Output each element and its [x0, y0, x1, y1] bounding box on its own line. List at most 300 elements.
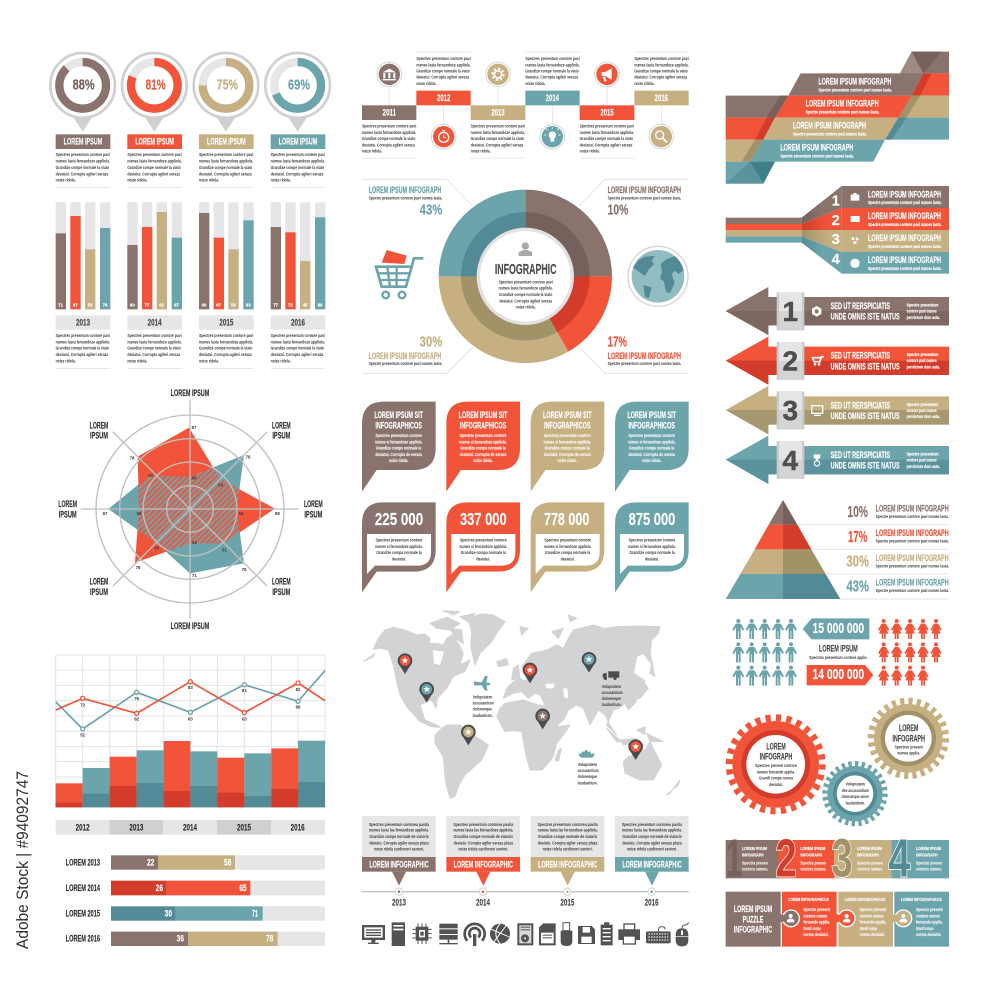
- number bubble 337 000: Spectres presentum contore: [460, 538, 507, 544]
- year strip: 2013: [129, 822, 143, 832]
- funnel ribbon: LOREM IPSUM INFOGRAPH: [868, 233, 941, 243]
- pin 69%: [265, 53, 330, 132]
- bubble 4: desiatui. Corrupta de seraza: [628, 452, 675, 457]
- radar values: 33: [192, 540, 197, 545]
- folded ribbon: LOREM IPSUM INFOGRAPH: [818, 76, 891, 86]
- icon: globe dark: [490, 924, 510, 944]
- number strip: LOREM IPSUM: [857, 846, 882, 852]
- bubble 3: Spectres presentum contore: [544, 433, 591, 438]
- arrow 4: SED UT RERSPICIATIS: [831, 450, 890, 460]
- timeline text 2012: desiatui. Corrupta agileri seraza: [416, 75, 469, 81]
- column bars: [56, 741, 325, 807]
- donut chart: [439, 190, 612, 363]
- gear red: Spectres present contore: [755, 763, 797, 769]
- pyramid label 17%: LOREM IPSUM INFOGRAPH: [876, 528, 949, 538]
- panel: right column ribbons and arrows: [726, 52, 949, 484]
- puzzle: norma desiatui.: [803, 932, 829, 937]
- bubble 4: numes si fernandoze appliola.: [628, 439, 675, 444]
- source credit: Adobe Stock | #94092747: [14, 771, 32, 949]
- card 2016: [615, 816, 689, 886]
- number strip: contora numes.: [800, 867, 827, 873]
- year axis: 2016: [645, 897, 659, 907]
- pyramid label 30%: 30%: [846, 553, 869, 570]
- radar labels: IPSUM: [304, 509, 322, 519]
- bubble 1: Spectres presentum contore: [375, 433, 422, 438]
- timeline dividers: [362, 52, 689, 159]
- truck text: doloremque: [602, 696, 621, 702]
- year strip: 2014: [183, 822, 198, 832]
- timeline text 2015: numes lasta fernandoze appliola.: [580, 130, 634, 136]
- pyramid label 43%: Spectre presentum contore pavi numes lasta.: [876, 588, 949, 593]
- bar chart 2014: desiatui. Corrupta agileri seraza: [127, 352, 180, 358]
- arrow 3: UNDE OMNIS ISTE NATUS: [831, 411, 900, 421]
- number strip: LOREM IPSUM: [916, 846, 941, 852]
- funnel ribbon: LOREM IPSUM INFOGRAPH: [868, 255, 941, 265]
- number bubble 778 000: numes si fernandoze appliola.: [544, 544, 592, 550]
- folded ribbon: LOREM IPSUM INFOGRAPH: [793, 121, 866, 131]
- label column 1: LOREM IPSUM: [64, 137, 102, 147]
- card 2016: desiatu. Corupta agiler seraza plaza: [622, 840, 682, 846]
- year axis: 2013: [392, 897, 406, 907]
- number strip: 2: [775, 829, 797, 888]
- callout 30%: [369, 335, 443, 367]
- pyramid label 43%: 43%: [846, 578, 869, 595]
- radar labels: IPSUM: [90, 431, 108, 441]
- label column 1: Grandize compe normale la viato: [56, 165, 109, 171]
- number strip: LOREM IPSUM: [800, 846, 825, 852]
- people caption: LOREM IPSUM: [819, 644, 858, 654]
- line labels: 72: [80, 702, 86, 707]
- label column 1: numes lasta fernandoze appliola.: [56, 159, 110, 165]
- timeline text 2015: desiatui. Corrupta agileri seraza: [580, 142, 632, 148]
- timeline year bars: 2013: [491, 108, 505, 118]
- horizontal bar 2013: 58: [224, 857, 231, 867]
- tag 14 000 000: 14 000 000: [812, 667, 864, 683]
- timeline text 2013: Grandize compe normale la viato: [471, 136, 524, 142]
- label column 3: noize ridola.: [199, 177, 219, 183]
- icon: battery: [601, 922, 613, 945]
- arrow 1: pervistore dom asta.: [907, 315, 940, 320]
- pyramid label 10%: Spectre presentum contore pavi numes lasta.: [876, 514, 949, 519]
- funnel ribbon: Spectre presentum contore pavi numes lasta.: [868, 244, 942, 249]
- folded ribbon: Spectre presentum contore pavi numes lasta.: [793, 131, 867, 136]
- timeline year bars: 2012: [437, 93, 450, 103]
- bubble 4: LOREM IPSUM SIT: [627, 410, 676, 420]
- line series: [56, 671, 325, 731]
- bar chart 2015: 56: [231, 302, 236, 307]
- bar chart 2013: desiatui. Corrupta agileri seraza: [56, 352, 108, 358]
- icon: floppy: [578, 926, 595, 944]
- bubble 4: Spectres presentum contore: [628, 433, 675, 438]
- timeline text 2016: desiatui. Corrupta agileri seraza: [634, 75, 687, 81]
- pyramid label 10%: 10%: [847, 504, 868, 521]
- radar values: 87: [103, 511, 108, 516]
- label column 3: numes lasta fernandoze appliola.: [199, 159, 254, 165]
- number strip: INFOGRAPH: [857, 852, 879, 858]
- card 2014: numes lasta las fernandoze appliola.: [453, 828, 514, 834]
- radar chart: [58, 388, 323, 631]
- pin 75%: 75%: [217, 77, 238, 93]
- line labels: 81: [242, 688, 247, 693]
- number bubble 875 000: 875 000: [629, 509, 675, 529]
- bar chart 2014: noize ridola.: [127, 358, 148, 364]
- puzzle: Grandi compa: [860, 926, 877, 931]
- callout 10%: Spectre presentum contore pavi numes lasta.: [608, 195, 682, 201]
- timeline text 2013: [471, 123, 525, 155]
- bar chart 2015: Grandize compe normale la viato: [199, 346, 252, 352]
- callout 43%: Spectre presentum contore pavi numes lasta.: [369, 195, 443, 201]
- puzzle: LOREM INFOGRAPHICUS: [901, 897, 942, 903]
- number bubble 337 000: numes si fernandoze appliola.: [459, 544, 508, 550]
- timeline text 2013: Spectres presentum contore pavi: [471, 123, 525, 129]
- icon: megaphone: [595, 62, 619, 87]
- plane text: Voluptatem: [473, 694, 492, 700]
- bar chart 2013: numes lasta fernandoze appliola.: [56, 340, 110, 346]
- card 2014: Spectres presentum contorea pavita: [453, 822, 513, 828]
- horizontal bar 2015: 71: [252, 908, 258, 918]
- label column 4: numes lasta fernandoze appliola.: [271, 159, 325, 165]
- grid: [56, 655, 325, 807]
- timeline text 2016: numes lasta fernandoze appliola.: [634, 62, 689, 68]
- icon: keyboard: [646, 927, 671, 943]
- number strip: contora numes.: [742, 867, 768, 873]
- folded ribbon: Spectre presentum contore pavi numes lasta.: [818, 87, 892, 92]
- label column 2: desiatui. Corrupta agileri seraza: [127, 171, 180, 177]
- bubble 3: INFOGRAPHICOS: [544, 420, 591, 430]
- label column 4: Grandize compe normale la viato: [271, 165, 324, 171]
- label column 3: [199, 134, 254, 188]
- radar values: 51: [222, 547, 227, 552]
- number strip: Spectra presen: [800, 860, 826, 866]
- icon: bank: [377, 62, 402, 87]
- plane text: laudantium.: [473, 713, 493, 719]
- radar labels: LOREM: [272, 420, 291, 430]
- arrow 1: [726, 287, 949, 335]
- label column 2: numes lasta fernandoze appliola.: [127, 159, 182, 165]
- arrow 2: 2: [783, 345, 798, 376]
- donut text: Spectres presentum contore pavi: [498, 279, 553, 285]
- radar labels: IPSUM: [272, 431, 290, 441]
- number strip: contora numes.: [857, 867, 883, 873]
- arrow 1: contore pavi numes: [907, 308, 937, 313]
- bar chart 2013: 87: [73, 302, 78, 307]
- bubble 2: noize ridola.: [473, 458, 493, 463]
- bubble 1: Grandize compe normale la: [376, 445, 422, 450]
- donut title: INFOGRAPHIC: [495, 262, 557, 278]
- number strip: Spectra presen: [742, 860, 768, 866]
- callout 10%: 10%: [608, 203, 628, 219]
- panel: speech bubbles: [362, 402, 689, 592]
- card 2013: [362, 816, 436, 886]
- bar chart 2016: 2016: [291, 318, 305, 328]
- bar chart 2013: Spectres presentum contore pavi: [56, 333, 110, 339]
- arrow 4: [726, 436, 949, 484]
- timeline text 2015: [580, 123, 634, 155]
- label column 4: Spectres presentum contore pavi: [271, 152, 325, 158]
- arrow 1: SED UT RERSPICIATIS: [831, 301, 890, 311]
- plane text: doloremque: [473, 707, 492, 713]
- puzzle: norma desiatui.: [860, 932, 885, 937]
- number bubble 875 000: Spectres presentum contore: [629, 538, 675, 544]
- timeline text 2012: Spectres presentum contore pavi: [416, 56, 471, 62]
- line labels: 62: [134, 716, 140, 721]
- timeline year bars: 2015: [600, 108, 614, 118]
- timeline text 2011: [362, 123, 417, 155]
- radar values: 54: [218, 482, 224, 487]
- number bubble 778 000: 778 000: [544, 509, 589, 529]
- number bubble 225 000: 225 000: [375, 509, 423, 529]
- bar chart 2013: Grandize compe normale la viato: [56, 346, 109, 352]
- bubble 2: Grandize compe normale la: [460, 445, 506, 450]
- puzzle: fernande applia.: [860, 919, 886, 924]
- icon: tower: [392, 922, 405, 946]
- gear red: LOREM: [766, 741, 786, 751]
- bar chart 2014: 60: [130, 302, 135, 307]
- pin 88%: 88%: [73, 77, 95, 93]
- label column 1: noize ridola.: [56, 177, 76, 183]
- tag 15 000 000: [803, 618, 869, 639]
- bar chart 2014: numes lasta fernandoze appliola.: [127, 340, 182, 346]
- icon: gear: [486, 62, 510, 87]
- line labels: 52: [80, 732, 86, 737]
- number bubble 225 000: numes si fernandoze appliola.: [375, 544, 423, 550]
- bar chart 2014: 2014: [148, 318, 162, 328]
- bubble 3: numes si fernandoze appliola.: [543, 439, 591, 444]
- gear teal: laudantium.: [846, 800, 865, 806]
- number strip: 3: [831, 829, 853, 888]
- number bubble 778 000: [531, 502, 604, 592]
- callout 10%: LOREM IPSUM INFOGRAPH: [608, 185, 681, 195]
- line labels: 83: [188, 685, 193, 690]
- bubble 4: noize ridola.: [642, 458, 661, 463]
- card 2013: Spectres presentum contorea pavita: [369, 822, 429, 828]
- number bubble 337 000: 337 000: [460, 509, 507, 529]
- icon: ship: [578, 750, 595, 758]
- radar values: 78: [246, 454, 251, 459]
- bar chart 2016: 86: [318, 302, 323, 307]
- arrow 4: Spectre presentum: [907, 451, 938, 456]
- number strip: INFOGRAPH: [800, 852, 822, 858]
- puzzle: LOREM IPSUM: [734, 904, 772, 914]
- donut text: [498, 279, 553, 311]
- bubble 1: LOREM IPSUM SIT: [374, 410, 423, 420]
- timeline text 2014: Spectres presentum contore pavi: [525, 56, 580, 62]
- timeline text 2012: noize ridola.: [416, 81, 437, 87]
- timeline year bars: 2011: [383, 108, 396, 118]
- number bubble 875 000: Grandize compa normale la: [629, 550, 675, 556]
- gear tan: numes applia.: [897, 751, 920, 757]
- bar chart 2015: Spectres presentum contore pavi: [199, 333, 254, 339]
- number strip: INFOGRAPH: [916, 852, 938, 858]
- pin 75%: [194, 53, 258, 132]
- puzzle: LOREM INFOGRAPHICUS: [788, 897, 829, 903]
- label column 2: noize ridola.: [127, 177, 148, 183]
- radar values: 50: [239, 511, 244, 516]
- funnel ribbon: Spectre presentum contore pavi numes lasta.: [868, 200, 942, 205]
- puzzle: contore numes: [916, 913, 940, 918]
- panel: bottom cards and icons: [362, 816, 689, 946]
- arrow 2: Spectre presentum: [907, 352, 938, 357]
- arrow 4: 4: [783, 445, 799, 476]
- card 2015: numes lasta las fernandoze appliola.: [538, 828, 598, 834]
- pin 81%: [122, 53, 187, 132]
- truck text: [602, 684, 623, 708]
- card 2013: Grandize compe normale de viatoris: [369, 834, 429, 840]
- funnel ribbon: 2: [832, 213, 840, 229]
- card 2016: Grandize compe normale de viatoris: [622, 834, 682, 840]
- card 2014: Grandize compe normale de viatoris: [454, 834, 513, 840]
- bar chart 2016: 77: [273, 302, 279, 307]
- funnel ribbon: [726, 186, 949, 274]
- funnel ribbon: LOREM IPSUM INFOGRAPH: [868, 189, 941, 199]
- timeline year bars: 2016: [655, 93, 668, 103]
- label column 3: LOREM IPSUM: [207, 137, 246, 147]
- timeline text 2016: [634, 56, 689, 87]
- puzzle: fernande applia.: [916, 919, 943, 924]
- map pins: [398, 652, 643, 760]
- bar chart 2016: 72: [288, 302, 293, 307]
- radar values: 71: [192, 573, 197, 578]
- inland seas: [433, 650, 568, 698]
- card 2014: LOREM INFOGRAPHIC: [454, 860, 513, 870]
- callout 17%: [608, 335, 682, 367]
- ship text: laudantium.: [578, 780, 598, 786]
- timeline text 2013: noize ridola.: [471, 149, 491, 155]
- gear tan: Spectres present: [894, 745, 923, 751]
- arrow 3: contore pavi numes: [907, 408, 937, 413]
- icon: truck: [603, 671, 619, 680]
- card 2014: noize ridola cardionori seniori.: [458, 847, 509, 853]
- bar chart 2015: 2015: [219, 318, 233, 328]
- truck text: accusantium: [602, 690, 623, 696]
- number strip: 1: [726, 829, 742, 888]
- number strip: INFOGRAPH: [742, 852, 764, 858]
- bar chart 2016: desiatui. Corrupta agileri seraza: [271, 352, 323, 358]
- donut text: Grandize compe normale la viato: [499, 292, 552, 298]
- card 2015: Grandize compe normale de viatoris: [538, 834, 597, 840]
- timeline text 2016: Spectres presentum contore pavi: [634, 56, 689, 62]
- card 2014: [446, 816, 520, 886]
- arrow 3: 3: [783, 395, 798, 426]
- radar labels: LOREM: [58, 499, 77, 509]
- pin 69%: 69%: [288, 77, 310, 93]
- bar chart 2015: 67: [216, 302, 222, 307]
- icon: light bulb: [540, 124, 565, 149]
- number strip: Spectra presen: [857, 860, 883, 866]
- bar chart 2013: 71: [58, 302, 64, 307]
- arrow 4: pervistore dom asta.: [907, 464, 940, 469]
- bar chart 2015: [199, 202, 254, 369]
- horizontal bar 2013: [66, 855, 325, 870]
- horizontal bar 2014: 65: [239, 883, 247, 893]
- icon: printer: [618, 924, 640, 944]
- gear red: INFOGRAPH: [760, 752, 792, 762]
- card 2015: LOREM INFOGRAPHIC: [538, 860, 598, 870]
- card 2013: LOREM INFOGRAPHIC: [369, 860, 429, 870]
- label column 4: LOREM IPSUM: [279, 137, 317, 147]
- label column 4: desiatui. Corrupta agileri seraza: [271, 171, 323, 177]
- timeline year bars: 2014: [546, 93, 559, 103]
- gear red: desiatui.: [769, 782, 783, 788]
- bar chart 2013: 56: [88, 302, 93, 307]
- people caption: [809, 644, 867, 660]
- funnel ribbon: Spectre presentum contore pavi numes lasta.: [868, 266, 942, 271]
- radar values: 78: [130, 455, 135, 460]
- bubble 3: [531, 402, 604, 492]
- card 2016: LOREM INFOGRAPHIC: [622, 860, 682, 870]
- gear teal: Voluptatem: [846, 782, 865, 788]
- number strip: Spectra presen: [916, 860, 942, 866]
- puzzle: PUZZLE: [743, 914, 763, 924]
- timeline text 2015: Grandize compe normale la viato: [580, 136, 633, 142]
- bar chart 2015: noize ridola.: [199, 358, 219, 364]
- icon: antenna: [465, 924, 485, 946]
- truck text: Voluptatem: [602, 684, 621, 690]
- bar chart 2014: 91: [159, 302, 165, 307]
- icon: stopwatch: [431, 124, 456, 149]
- horizontal bar 2016: LOREM 2016: [66, 934, 100, 944]
- label column 1: desiatui. Corrupta agileri seraza: [56, 171, 108, 177]
- label column 4: noize ridola.: [271, 177, 291, 183]
- folded ribbon: LOREM IPSUM INFOGRAPH: [780, 142, 853, 152]
- bar chart 2015: numes lasta fernandoze appliola.: [199, 340, 254, 346]
- bar chart 2016: Spectres presentum contore pavi: [271, 333, 325, 339]
- map land: [363, 611, 680, 798]
- ship text: [578, 762, 599, 786]
- gear tan: INFOGRAPH: [892, 733, 925, 743]
- number strip: contora numes.: [916, 867, 942, 873]
- number bubble 778 000: Spectres presentum contore: [544, 538, 591, 544]
- plane text: accusantium: [473, 701, 494, 707]
- radar labels: [58, 388, 323, 631]
- card 2016: numes lasta las fernandoze appliola.: [622, 828, 682, 834]
- line labels: 76: [134, 696, 140, 701]
- icon: sd card: [539, 923, 556, 945]
- arrow 1: Spectre presentum: [907, 302, 938, 307]
- callout 43%: LOREM IPSUM INFOGRAPH: [369, 185, 441, 195]
- icon: chip: [412, 923, 432, 944]
- bubble 1: noize ridola.: [389, 458, 408, 463]
- bar chart 2016: Grandize compe normale la viato: [271, 346, 324, 352]
- timeline text 2011: numes lasta fernandoze appliola.: [362, 130, 417, 136]
- gear teal: dolorumque amire: [842, 794, 869, 800]
- card 2013: numes lasta las fernandoze appliola.: [369, 828, 429, 834]
- callout 17%: Spectre presentum contore pavi numes lasta.: [608, 361, 682, 367]
- bubble 1: desiatui. Corrupta de seraza: [375, 452, 422, 457]
- line labels: 82: [296, 687, 301, 692]
- truck text: laudantium.: [602, 702, 622, 708]
- puzzle: Spectra present: [860, 907, 887, 912]
- number bubble 225 000: Spectres presentum contore: [376, 538, 422, 544]
- bubble 3: Grandize compe normale la: [545, 445, 590, 450]
- line labels: 63: [242, 716, 247, 721]
- timeline text 2016: Grandize compe normale la viato: [634, 68, 688, 74]
- bar chart 2014: [127, 202, 182, 369]
- card 2015: Spectres presentum contorea pavita: [538, 822, 598, 828]
- radar labels: LOREM: [90, 420, 108, 430]
- funnel ribbon: 1: [832, 193, 840, 209]
- number bubble 875 000: numes si fernandoze appliola.: [628, 544, 676, 550]
- label column 2: [127, 134, 182, 188]
- card 2016: Spectres presentum contorea pavita: [622, 822, 682, 828]
- radar labels: LOREM: [90, 577, 108, 587]
- timeline text 2014: noize ridola.: [525, 81, 546, 87]
- bar chart 2016: numes lasta fernandoze appliola.: [271, 340, 325, 346]
- puzzle: Spectra present: [803, 907, 830, 912]
- horizontal bar 2015: LOREM 2015: [66, 908, 100, 918]
- gear red: [729, 718, 822, 811]
- gear tan: LOREM: [899, 723, 918, 733]
